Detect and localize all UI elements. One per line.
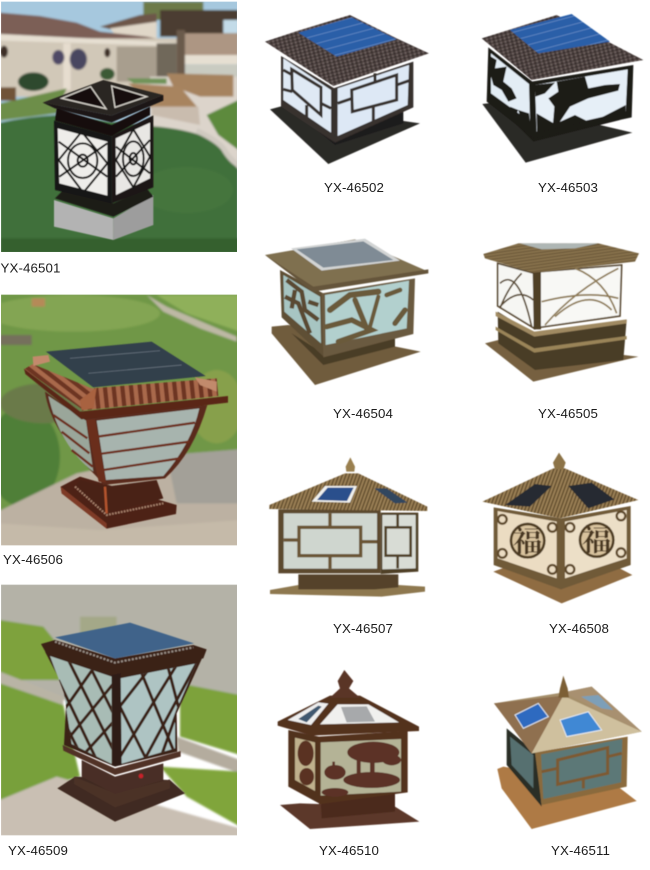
fortune character: 福 <box>513 518 542 560</box>
lamp YX-46502 <box>265 15 429 164</box>
cloud ornaments <box>498 515 557 574</box>
stone pedestal <box>54 195 153 240</box>
lamp roof <box>43 80 163 122</box>
right solar panel <box>568 483 614 508</box>
right panel <box>318 731 408 804</box>
pyramid roof <box>494 687 642 753</box>
left solar panel <box>515 703 548 728</box>
left panel <box>288 730 319 803</box>
lamp YX-46507 <box>269 457 427 597</box>
photo: YX-46501 garden scene <box>0 0 240 253</box>
solar panel <box>510 14 610 53</box>
right panel <box>561 506 631 589</box>
front solar panel <box>320 704 399 724</box>
right panel <box>322 278 415 357</box>
side panel <box>381 513 418 574</box>
solar panel <box>46 342 206 387</box>
tiled roof <box>265 15 429 86</box>
solar panel <box>298 17 397 57</box>
right panel <box>535 737 628 805</box>
copper lamp <box>24 342 228 529</box>
left panel <box>507 728 542 807</box>
base plate <box>482 102 632 163</box>
photo: YX-46509 lattice lamp <box>0 583 240 837</box>
lamp YX-46505 <box>483 243 639 382</box>
lamp body left face <box>54 121 112 203</box>
base plate <box>270 104 420 164</box>
lamp body right face <box>112 115 153 203</box>
right panel <box>540 265 622 327</box>
roof <box>278 696 419 736</box>
left solar panel <box>505 484 552 507</box>
lamp base <box>61 477 177 529</box>
photo: YX-46506 copper lamp on stone <box>0 293 243 547</box>
stepped plinth <box>496 312 627 370</box>
label YX-46511: YX-46511 <box>551 843 610 858</box>
roof <box>269 473 427 511</box>
finial <box>330 670 360 698</box>
lamp glass faces <box>45 392 207 485</box>
garden background <box>0 0 240 253</box>
right panel <box>333 62 413 143</box>
base plate <box>280 803 419 829</box>
label YX-46502: YX-46502 <box>324 180 384 195</box>
roof <box>483 243 639 273</box>
tile roof <box>24 355 228 419</box>
label YX-46501: YX-46501 <box>0 260 60 276</box>
lamp YX-46508 <box>482 453 638 603</box>
lamp cap <box>41 640 207 671</box>
right panel <box>532 65 633 138</box>
finial <box>558 676 569 698</box>
base plate <box>270 585 425 597</box>
cloud ornaments <box>566 512 625 574</box>
solar panel <box>55 623 194 663</box>
left panel <box>494 507 561 589</box>
lamp YX-46504 <box>265 239 428 385</box>
lamp centre post and collar <box>63 673 181 775</box>
base plate <box>272 325 421 385</box>
left panel <box>487 47 534 138</box>
lamp YX-46503 <box>482 14 643 163</box>
lamp base <box>57 760 185 822</box>
label YX-46507: YX-46507 <box>333 621 393 636</box>
grass and stone background <box>0 293 243 547</box>
roof <box>482 468 638 518</box>
tiled roof <box>482 15 643 80</box>
label YX-46506: YX-46506 <box>3 552 63 567</box>
rear solar panel <box>581 695 613 710</box>
base plate <box>497 767 637 829</box>
front solar panel <box>560 712 602 737</box>
side solar panel <box>374 488 408 503</box>
label YX-46509: YX-46509 <box>8 843 68 858</box>
label YX-46504: YX-46504 <box>333 406 393 421</box>
label YX-46508: YX-46508 <box>549 621 609 636</box>
road, grass and wood background <box>0 583 240 837</box>
lamp body frame <box>45 652 204 767</box>
lamp right glass lattice <box>118 663 197 764</box>
solar panel <box>291 239 400 271</box>
fortune character: 福 <box>582 518 611 560</box>
left panel <box>498 263 534 328</box>
front panel <box>278 509 381 573</box>
roof <box>265 239 428 292</box>
finial <box>553 453 566 469</box>
brown lattice lamp <box>41 623 207 822</box>
lamp left glass lattice <box>50 656 115 764</box>
finial <box>346 457 355 472</box>
lamp on stone pedestal <box>43 80 163 240</box>
left panel <box>281 56 335 143</box>
lamp YX-46511 <box>494 676 642 829</box>
left panel <box>280 270 324 357</box>
label YX-46503: YX-46503 <box>538 180 598 195</box>
front solar panel <box>312 486 357 503</box>
solar panel <box>520 243 598 249</box>
label YX-46505: YX-46505 <box>538 406 598 421</box>
base plate <box>485 340 638 382</box>
left solar panel <box>288 702 328 725</box>
base plate <box>493 565 632 603</box>
lamp YX-46510 <box>278 670 419 829</box>
label YX-46510: YX-46510 <box>319 843 379 858</box>
